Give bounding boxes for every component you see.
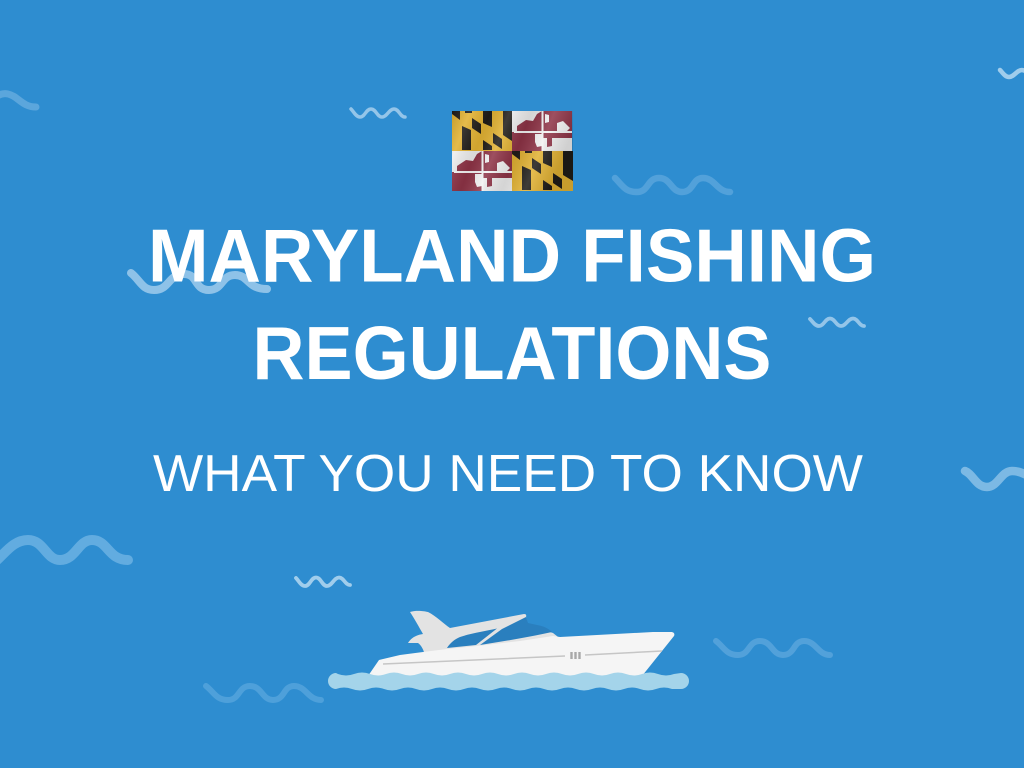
flag quadrant: Crossland top right: [512, 111, 572, 151]
title line 2: REGULATIONS: [252, 311, 772, 395]
wave: right edge: [965, 471, 1024, 487]
title: [148, 214, 876, 395]
flag quadrant: Calvert bottom right: [512, 151, 573, 191]
icon: motor yacht on water: [328, 611, 689, 690]
wave: top centre left: [351, 109, 405, 117]
boat hull stripe: [383, 651, 662, 664]
wave: behind title: [131, 273, 267, 290]
wave: top left: [0, 94, 36, 107]
wave: top right: [1000, 70, 1024, 77]
wave: right of boat: [716, 641, 830, 655]
wave: left of boat: [206, 686, 321, 700]
wave: left edge: [0, 540, 128, 561]
wave: above boat left: [296, 578, 350, 586]
boat fin, roof and cabin: [408, 611, 562, 656]
wave: right of title: [810, 318, 864, 326]
flag quadrant: Calvert top left: [452, 111, 512, 151]
flag sheen: [452, 111, 573, 191]
title line 1: MARYLAND FISHING: [148, 214, 876, 298]
boat hull: [368, 632, 674, 676]
boat vents: [572, 652, 580, 659]
wave: beside flag: [615, 178, 730, 192]
flag quadrant: Crossland bottom left: [452, 151, 512, 191]
icon: Maryland flag: [452, 111, 573, 191]
subtitle: WHAT YOU NEED TO KNOW: [153, 444, 863, 502]
boat windows: [447, 617, 552, 648]
water under boat: [328, 672, 689, 690]
